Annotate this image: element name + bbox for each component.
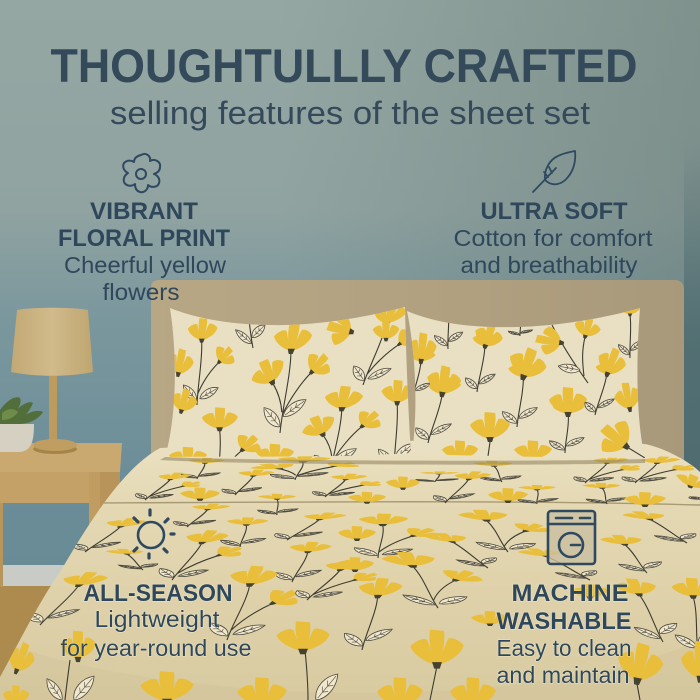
left pillow — [168, 307, 411, 457]
heading: VIBRANT — [90, 198, 198, 225]
heading: ULTRA SOFT — [480, 198, 628, 225]
duvet fold line — [95, 502, 700, 505]
floor and baseboard — [0, 565, 170, 700]
duvet bottom row large flowers — [3, 621, 700, 700]
feature: machine washable: WASHABLE — [496, 608, 632, 635]
feature: vibrant floral print — [58, 154, 230, 305]
feature: machine washable — [496, 511, 632, 688]
heading: MACHINE — [512, 580, 628, 607]
headboard — [151, 280, 684, 480]
feature: machine washable: and maintain — [496, 662, 630, 688]
title: THOUGHTULLLY CRAFTED — [50, 39, 638, 92]
feature: all-season: for year-round use — [60, 635, 252, 661]
description: Cotton for comfort — [454, 225, 653, 251]
bedside table — [0, 443, 122, 587]
right pillow — [407, 308, 645, 458]
icon: washing machine — [548, 511, 595, 564]
feature: vibrant floral print: flowers — [102, 279, 180, 305]
potted plant — [0, 397, 43, 452]
feature: vibrant floral print: FLORAL PRINT — [58, 225, 230, 252]
duvet with floral pattern — [0, 430, 700, 700]
feature: all-season — [60, 510, 252, 661]
icon: feather — [533, 151, 575, 192]
description: Cheerful yellow — [64, 252, 226, 278]
icon: sun — [134, 510, 174, 558]
table lamp — [11, 308, 93, 454]
feature: ultra soft — [454, 151, 653, 278]
subtitle: selling features of the sheet set — [110, 95, 590, 131]
description: Easy to clean — [496, 635, 632, 661]
pillow shadow — [160, 457, 645, 465]
duvet top row sprigs — [125, 456, 700, 527]
description: Lightweight — [94, 606, 220, 632]
icon: flower — [123, 154, 160, 192]
duvet middle row sprigs — [13, 510, 700, 652]
heading: ALL-SEASON — [84, 580, 232, 607]
feature: ultra soft: and breathability — [460, 252, 638, 278]
